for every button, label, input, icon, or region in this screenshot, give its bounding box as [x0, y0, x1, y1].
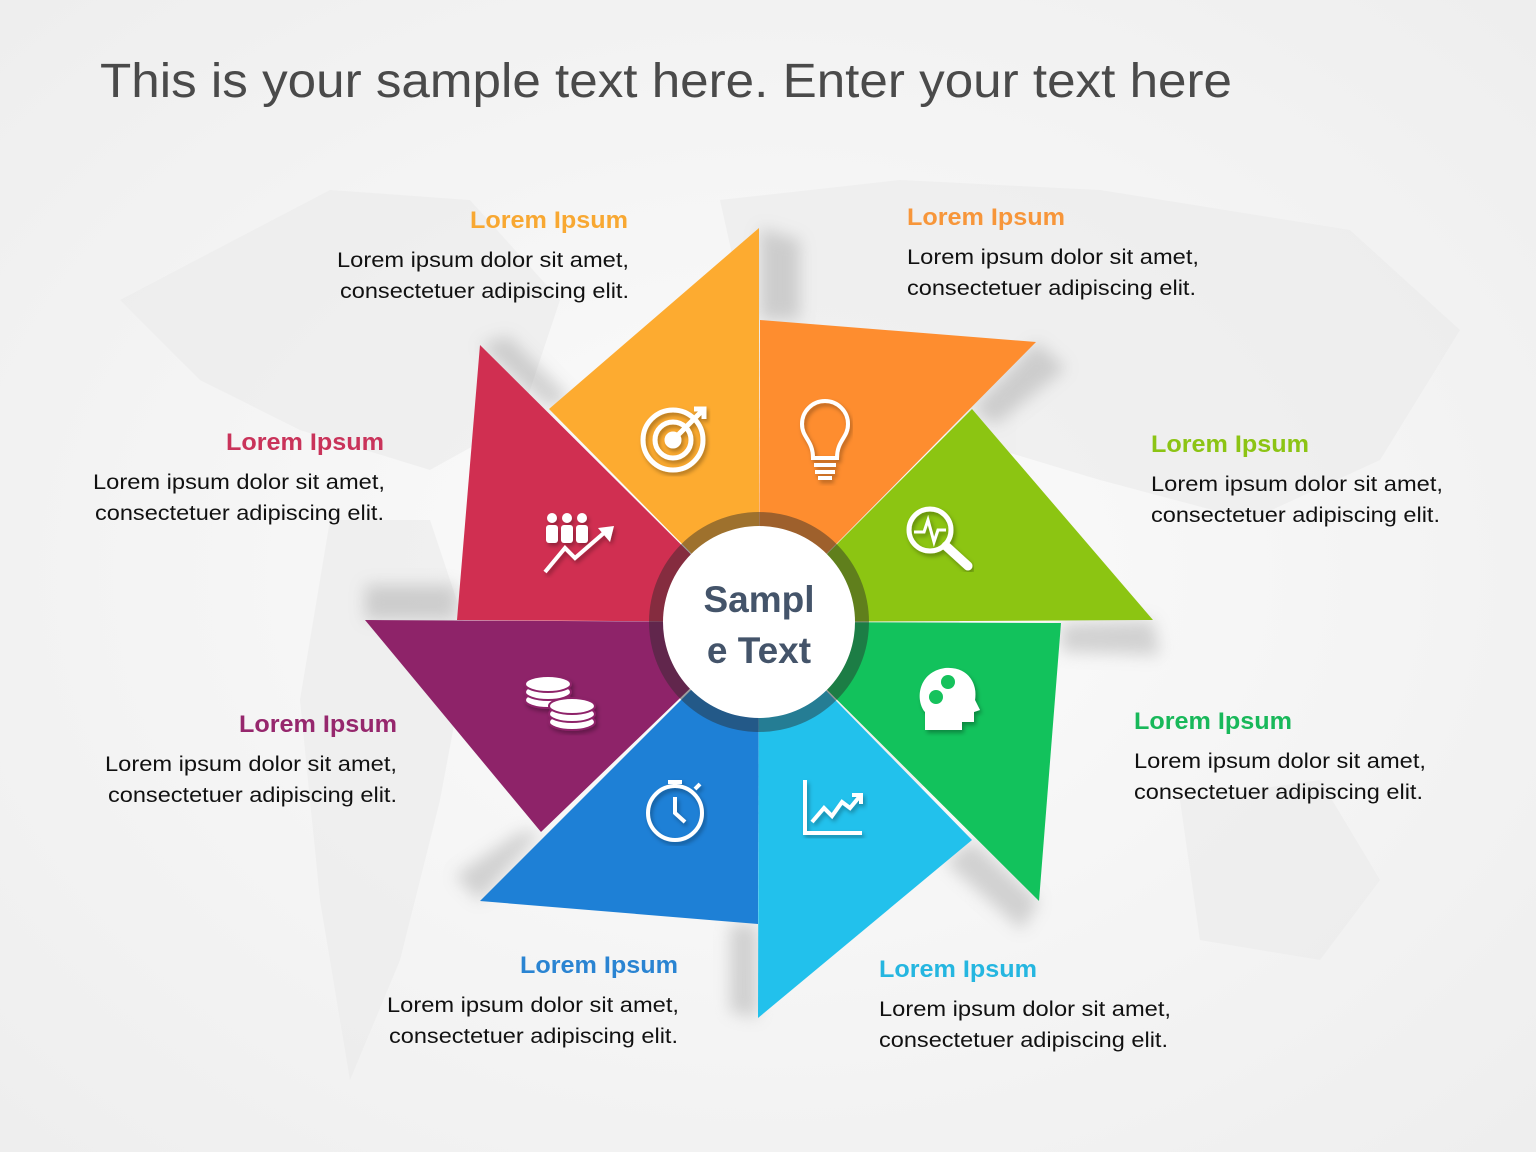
icon: stopwatch	[648, 782, 702, 840]
text: purple: Lorem Ipsum	[239, 711, 397, 738]
text: cyan: Lorem ipsum dolor sit amet,	[879, 998, 1171, 1021]
text: blue: Lorem Ipsum	[520, 952, 678, 979]
blade: red	[457, 345, 759, 622]
blade: lime	[759, 409, 1153, 622]
text: green	[1134, 708, 1426, 804]
blade: purple	[365, 620, 759, 832]
text: yellow	[337, 207, 629, 303]
blade: cyan	[758, 622, 972, 1018]
text: lime: Lorem Ipsum	[1151, 431, 1309, 458]
text: orange: consectetuer adipiscing elit.	[907, 277, 1196, 300]
icon: chart	[805, 780, 862, 833]
text: red	[93, 429, 385, 525]
icon: target	[643, 409, 704, 470]
text: purple	[105, 711, 397, 807]
blade: yellow	[549, 228, 759, 622]
text: lime: Lorem ipsum dolor sit amet,	[1151, 473, 1443, 496]
text: lime	[1151, 431, 1443, 527]
text: green: Lorem ipsum dolor sit amet,	[1134, 750, 1426, 773]
pinwheel	[365, 228, 1160, 1018]
text: yellow: consectetuer adipiscing elit.	[340, 280, 629, 303]
shadows	[365, 228, 1160, 1018]
text: yellow: Lorem Ipsum	[470, 207, 628, 234]
text: lime: consectetuer adipiscing elit.	[1151, 504, 1440, 527]
text: orange: Lorem Ipsum	[907, 204, 1065, 231]
icon: magnifier pulse	[909, 509, 968, 566]
icon: bulb	[802, 401, 848, 478]
icon: team growth	[545, 513, 614, 572]
text: orange: Lorem ipsum dolor sit amet,	[907, 246, 1199, 269]
text: cyan	[879, 956, 1171, 1052]
text: green: Lorem Ipsum	[1134, 708, 1292, 735]
center circle	[649, 512, 869, 732]
text: yellow: Lorem ipsum dolor sit amet,	[337, 249, 629, 272]
text: red: Lorem ipsum dolor sit amet,	[93, 471, 385, 494]
title: This is your sample text here. Enter your text here	[100, 55, 1232, 108]
icon: coins	[525, 676, 595, 730]
text: cyan: consectetuer adipiscing elit.	[879, 1029, 1168, 1052]
text: blue	[387, 952, 679, 1048]
blade: green	[759, 622, 1061, 901]
blade: orange	[759, 320, 1036, 622]
text: cyan: Lorem Ipsum	[879, 956, 1037, 983]
text: orange	[907, 204, 1199, 300]
text: purple: Lorem ipsum dolor sit amet,	[105, 753, 397, 776]
text: blue: consectetuer adipiscing elit.	[389, 1025, 678, 1048]
center circle: Sampl	[703, 579, 815, 620]
decorative world map	[120, 180, 1460, 1080]
text: blue: Lorem ipsum dolor sit amet,	[387, 994, 679, 1017]
text: green: consectetuer adipiscing elit.	[1134, 781, 1423, 804]
center circle: e Text	[707, 630, 811, 671]
icon: head gears	[920, 668, 980, 730]
blade: blue	[480, 622, 759, 924]
text: red: Lorem Ipsum	[226, 429, 384, 456]
text: red: consectetuer adipiscing elit.	[95, 502, 384, 525]
text: purple: consectetuer adipiscing elit.	[108, 784, 397, 807]
